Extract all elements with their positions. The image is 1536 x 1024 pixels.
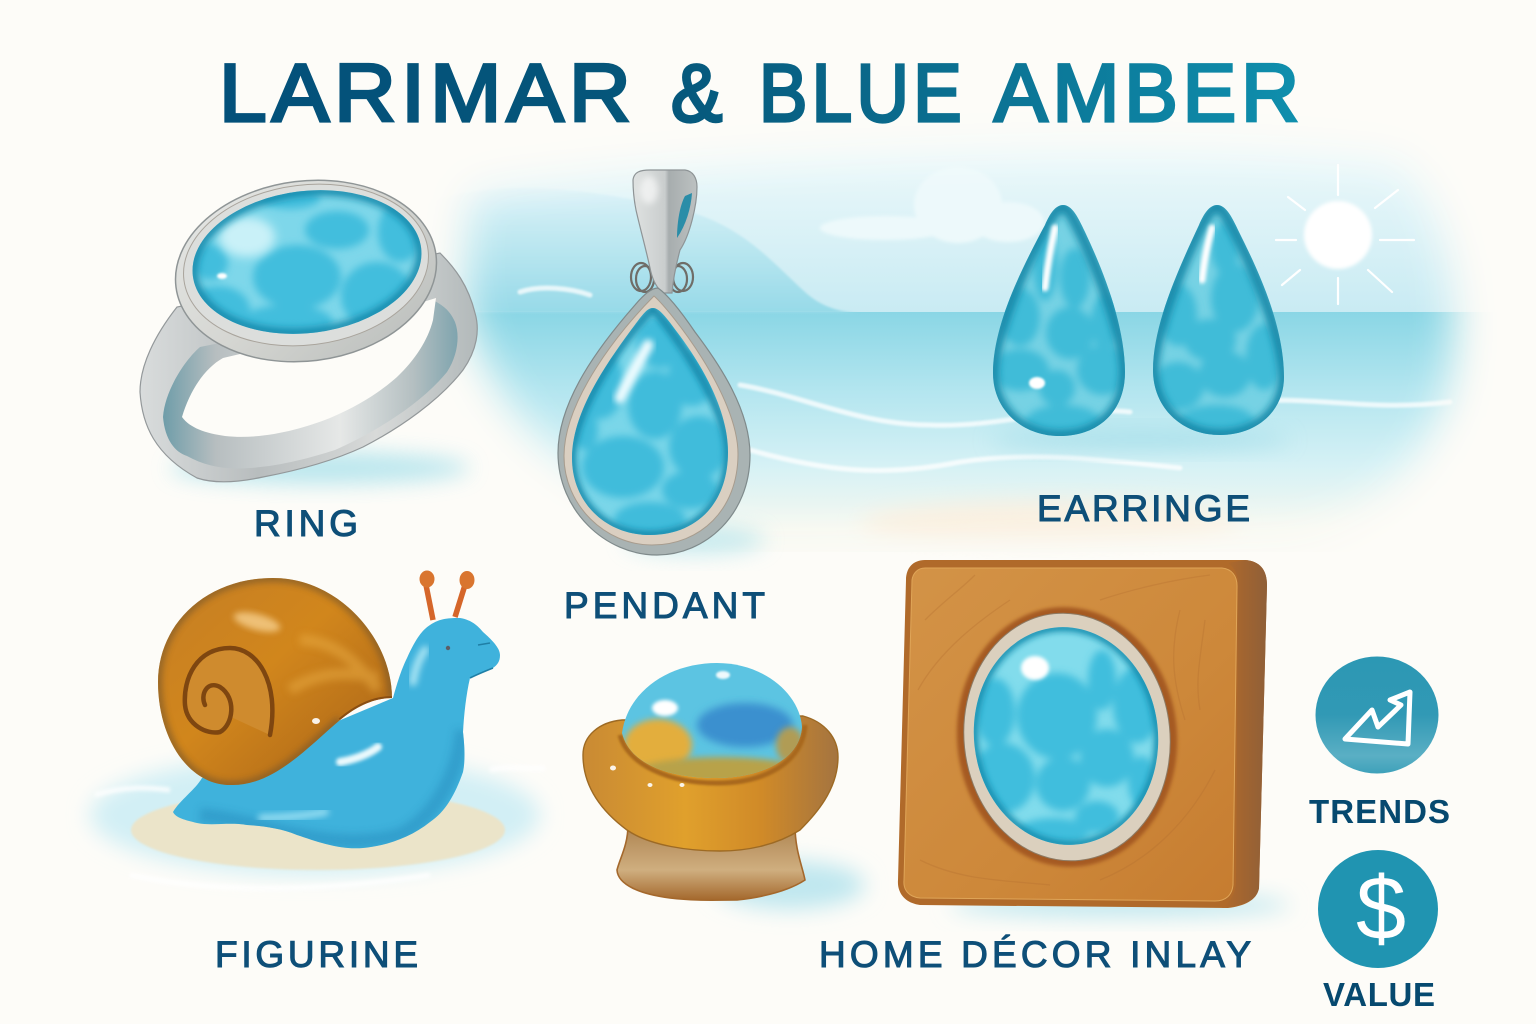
label: value: VALUE [1323, 976, 1435, 1013]
inlay frame [952, 603, 1182, 871]
label: home decor inlay: HOME DÉCOR INLAY [819, 934, 1251, 975]
ring inner face [163, 300, 458, 468]
jump rings [631, 263, 693, 292]
sky [470, 146, 1472, 312]
hill [452, 191, 852, 312]
bail [633, 170, 697, 293]
item: earrings [985, 200, 1295, 450]
pendant frame [558, 288, 750, 555]
title: AMBER [994, 48, 1304, 139]
waves [520, 288, 1450, 471]
inlay stone [974, 627, 1158, 845]
wood side [1222, 560, 1267, 908]
antennae [420, 570, 474, 620]
beach scene backdrop [444, 146, 1481, 544]
title: & [671, 48, 727, 139]
sand [131, 790, 505, 870]
bowl [583, 716, 838, 851]
item: amber bowl [583, 660, 865, 909]
sea [463, 312, 1481, 524]
inlay recess [946, 598, 1188, 876]
title [219, 48, 1304, 139]
base [617, 825, 805, 900]
dome [622, 663, 802, 778]
wood face [904, 568, 1237, 901]
pendant stone [572, 308, 728, 535]
label: ring: RING [254, 503, 358, 544]
item: pendant [558, 170, 765, 555]
ring opening [182, 298, 436, 437]
water glow [90, 755, 540, 875]
item: snail figurine [90, 570, 545, 888]
wood block [898, 560, 1267, 908]
sand [873, 500, 1226, 538]
icon: value: $ [1356, 859, 1406, 959]
ring bezel [165, 166, 447, 376]
icon: value [1318, 850, 1438, 968]
sun [1276, 165, 1414, 304]
body [170, 610, 505, 855]
item: home decor inlay [898, 560, 1290, 917]
title: LARIMAR [219, 48, 636, 139]
label: figurine: FIGURINE [215, 934, 418, 975]
left earring [993, 205, 1125, 436]
label: earringe: EARRINGE [1037, 488, 1250, 529]
ring stone [192, 190, 422, 334]
cloud [820, 182, 1044, 244]
title: BLUE [759, 48, 966, 139]
label: pendant: PENDANT [564, 585, 765, 626]
item: ring [140, 166, 477, 484]
shell spiral [185, 648, 272, 735]
shell [158, 578, 392, 785]
icon: trends [1316, 656, 1438, 774]
ring band outer [140, 253, 477, 482]
right earring [1153, 205, 1284, 435]
label: trends: TRENDS [1309, 793, 1450, 830]
